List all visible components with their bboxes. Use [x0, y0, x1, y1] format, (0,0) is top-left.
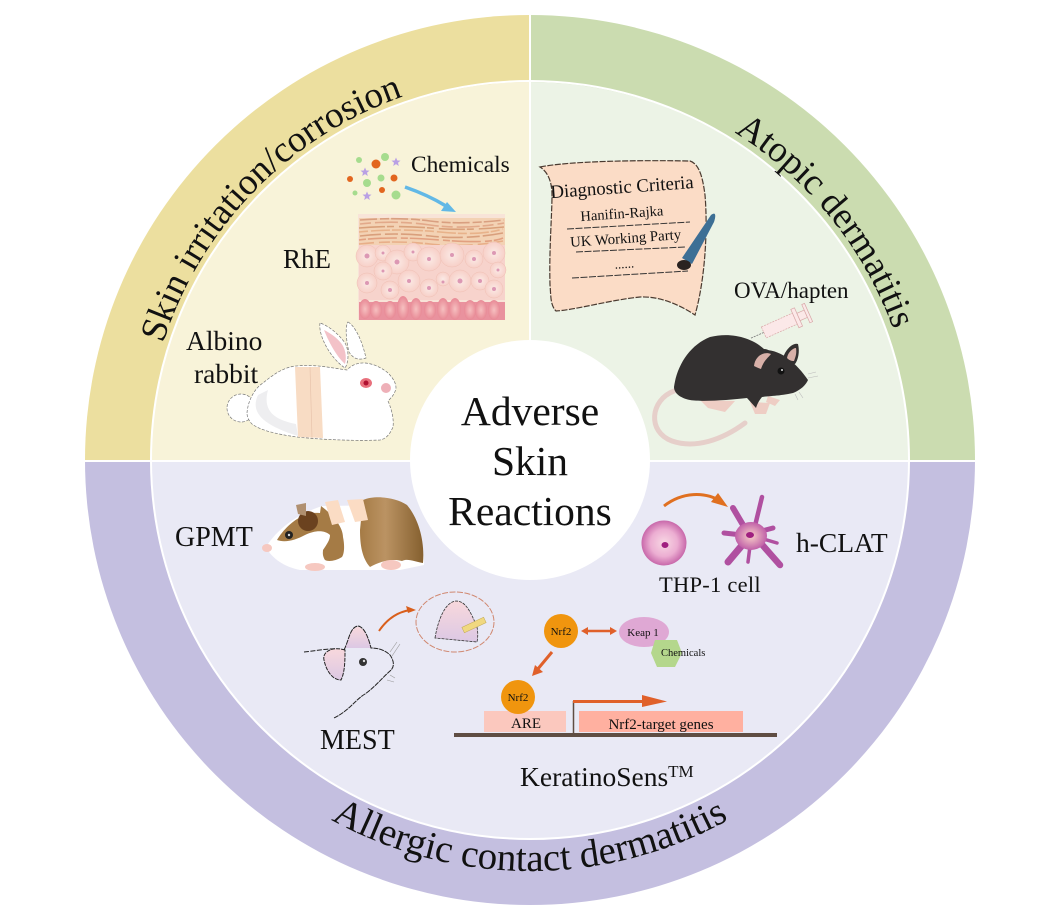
arrow: MEST to ear	[379, 606, 416, 631]
label: KeratinoSens TM: KeratinoSens	[520, 761, 668, 792]
icon: chemical particles	[347, 153, 400, 200]
label: KeratinoSens TM: TM	[668, 762, 694, 781]
label: chemicals: Chemicals	[411, 152, 510, 178]
arrow: chemicals to skin	[405, 187, 456, 212]
illustration: diagnostic criteria scroll: Diagnostic Criteria	[550, 172, 695, 203]
label: MEST: MEST	[320, 725, 395, 756]
heading: skin irritation/corrosion: Skin irritation/corrosion	[142, 82, 402, 341]
center circle title: Adverse	[461, 388, 599, 434]
node: Chemicals hexagon	[651, 640, 705, 667]
icon: ear magnified	[416, 592, 494, 652]
illustration: MEST mouse head	[304, 626, 400, 718]
panel: allergic contact dermatitis outer ring	[85, 460, 975, 905]
center circle title: Reactions	[448, 488, 612, 534]
center circle title: Skin	[492, 438, 568, 484]
icon: syringe	[747, 303, 813, 347]
icon: pen	[677, 214, 715, 270]
label: albino rabbit: rabbit	[194, 358, 259, 389]
illustration: diagnostic criteria scroll: Hanifin-Rajka	[580, 203, 664, 225]
illustration: reconstructed human epidermis tissue	[356, 214, 506, 320]
arrow: Nrf2 to ARE	[532, 652, 552, 676]
illustration: diagnostic criteria scroll: ......	[614, 255, 635, 272]
node: Keap 1	[619, 617, 669, 647]
label: albino rabbit: Albino	[186, 325, 262, 356]
illustration: black mouse	[655, 335, 818, 444]
node: Keap 1: Keap 1	[627, 627, 659, 639]
gene box: ARE	[484, 711, 566, 732]
gene box: Nrf2-target genes	[579, 711, 743, 733]
node: Chemicals hexagon: Chemicals	[661, 648, 705, 659]
illustration: diagnostic criteria scroll: UK Working Party	[570, 227, 682, 251]
panel: skin irritation inner sector	[151, 82, 530, 460]
heading: atopic dermatitis: Atopic dermatitis	[734, 118, 909, 328]
gene box: Nrf2-target genes: Nrf2-target genes	[608, 717, 714, 733]
node: Nrf2 upper: Nrf2	[551, 626, 571, 638]
label: RhE: RhE	[283, 244, 331, 274]
label: OVA/hapten: OVA/hapten	[734, 278, 849, 303]
panel: skin irritation outer ring	[85, 15, 530, 460]
heading: allergic contact dermatitis: Allergic contact dermatitis	[331, 802, 726, 872]
label: h-CLAT: h-CLAT	[796, 527, 888, 558]
center circle title	[410, 340, 650, 580]
illustration: guinea pig	[262, 497, 424, 571]
label: GPMT: GPMT	[175, 522, 253, 553]
illustration: diagnostic criteria scroll	[540, 161, 706, 315]
label: THP-1 cell: THP-1 cell	[659, 572, 761, 597]
diagram: KeratinoSens Nrf2 pathway	[454, 614, 777, 737]
icon: dendritic cell	[724, 497, 780, 565]
icon: THP-1 cell	[642, 520, 686, 566]
panel: atopic dermatitis outer ring	[530, 15, 975, 460]
label: albino rabbit	[186, 325, 262, 389]
arrow: THP-1 to activated cell	[664, 493, 728, 507]
panel: atopic inner sector	[530, 82, 909, 460]
gene box: ARE: ARE	[511, 716, 541, 732]
arrow: transcription start	[573, 695, 667, 735]
arrow: Nrf2 to Keap1	[581, 627, 617, 635]
panel: allergic inner sector	[151, 460, 909, 839]
node: Nrf2 lower	[501, 680, 535, 714]
illustration: albino rabbit	[227, 322, 396, 440]
DNA strand	[454, 733, 777, 737]
node: Nrf2 lower: Nrf2	[508, 692, 528, 704]
node: Nrf2 upper	[544, 614, 578, 648]
